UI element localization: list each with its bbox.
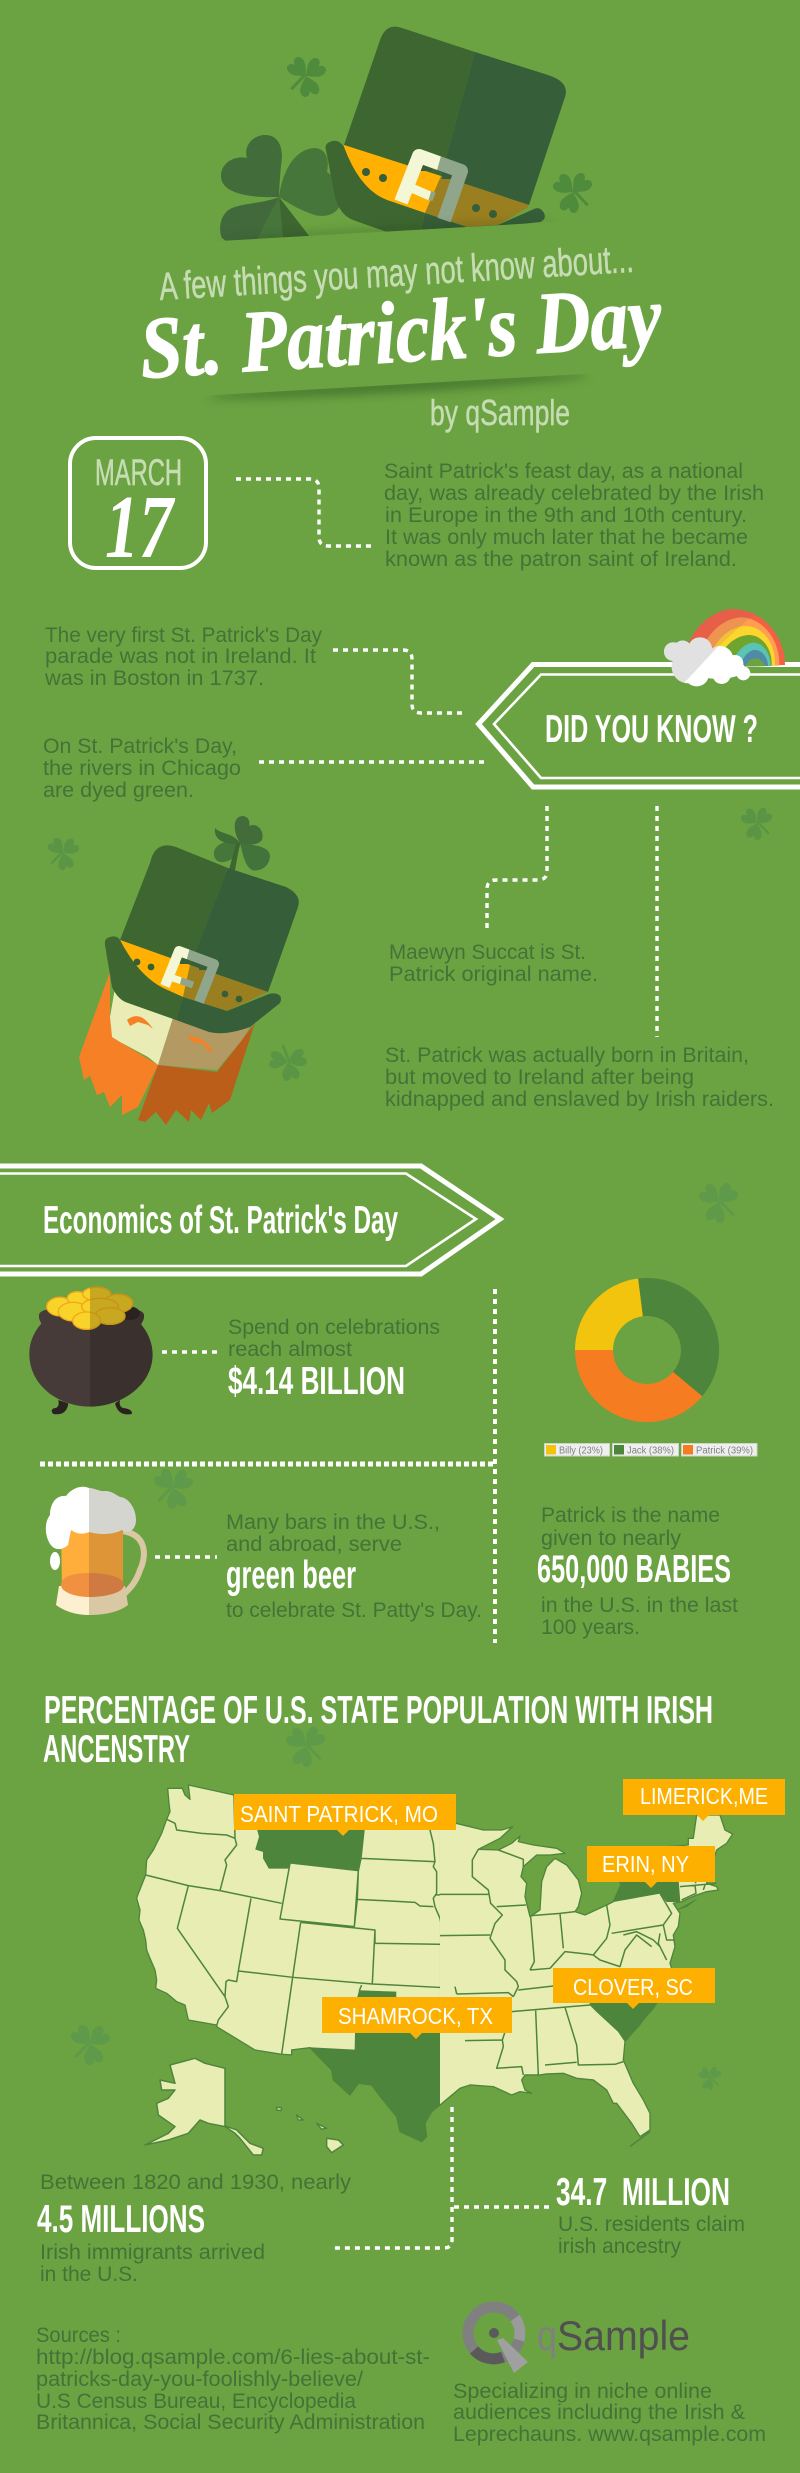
stat: Irish immigrants: in the U.S. [40, 2263, 138, 2286]
byline: by qSample [430, 392, 570, 433]
text: first parade: The very first St. Patrick's Day [45, 624, 322, 647]
text: Chicago river [43, 735, 241, 802]
hat brim [326, 141, 545, 235]
text: qSample description [453, 2380, 766, 2446]
text: first parade: parade was not in Ireland. It [45, 645, 316, 668]
connector: Chicago to banner [259, 760, 489, 764]
March label: MARCH [95, 452, 182, 493]
sources: Sources : [36, 2324, 121, 2347]
text: feast day: It was only much later that he became [385, 526, 748, 549]
text: Maewyn Succat: Maewyn Succat is St. [389, 941, 586, 964]
divider: vertical [493, 1289, 497, 1643]
green beer highlight: green beer [226, 1554, 356, 1597]
label: Erin [587, 1846, 715, 1888]
Hawaii [277, 2107, 343, 2153]
text: Chicago river: On St. Patrick's Day, [43, 735, 237, 758]
banner: economics [0, 1166, 500, 1274]
immigrants figure: 4.5 MILLIONS [37, 2198, 205, 2241]
hat band [344, 145, 529, 227]
text: born in Britain: but moved to Ireland after being [385, 1066, 694, 1089]
connector: to 34.7 million [454, 2205, 552, 2209]
icon: beer mug [46, 1487, 144, 1615]
eastern state lines [440, 1847, 717, 2147]
label: Saint Patrick: SAINT PATRICK, MO [240, 1801, 438, 1827]
label: Clover: CLOVER, SC [573, 1974, 693, 2000]
chart legend [544, 1444, 757, 1456]
text: feast day: Saint Patrick's feast day, as a national [384, 460, 743, 483]
title shadow [212, 374, 584, 402]
connector: Maewyn [487, 806, 547, 931]
stat: babies named Patrick: Patrick is the name [541, 1504, 720, 1527]
label: Erin: ERIN, NY [602, 1851, 689, 1877]
text: feast day: in Europe in the 9th and 10th century. [385, 504, 747, 527]
map: United States [137, 1779, 785, 2155]
eyebrows [127, 1016, 213, 1052]
text: feast day [384, 460, 764, 571]
stat: babies named Patrick: in the U.S. in the last [541, 1594, 738, 1617]
stat: celebration spend [228, 1316, 440, 1403]
donut chart [575, 1278, 719, 1422]
date box: March 17 [70, 438, 206, 577]
sources: http://blog.qsample.com/6-lies-about-st- [36, 2346, 430, 2369]
stat: Irish immigrants [37, 2171, 352, 2286]
New York [613, 1880, 680, 1902]
text: feast day: known as the patron saint of Ireland. [385, 548, 737, 571]
hat ground shadow [278, 220, 538, 238]
beer [61, 1525, 89, 1590]
stat: babies named Patrick: 100 years. [541, 1616, 640, 1639]
title: St. Patrick's Day [137, 268, 665, 398]
leprechaun hat brim [105, 936, 183, 1020]
spend figure: $4.14 BILLION [228, 1360, 405, 1403]
stat: babies named Patrick [537, 1504, 738, 1639]
sources: Britannica, Social Security Administration [36, 2411, 425, 2434]
icon: cloud [664, 637, 750, 686]
background shamrocks [46, 55, 774, 2091]
sources [36, 2324, 430, 2434]
hair [79, 972, 158, 1115]
map west [137, 1785, 472, 2155]
Montana [256, 1827, 364, 1871]
connector: parade to banner [333, 650, 467, 713]
text: Maewyn Succat: Patrick original name. [389, 963, 598, 986]
stat: babies named Patrick: given to nearly [541, 1527, 682, 1550]
stat: Irish immigrants: Between 1820 and 1930, nearly [40, 2171, 352, 2194]
stat: residents with Irish ancestry: irish ancestry [558, 2235, 681, 2258]
Texas [310, 1991, 472, 2142]
mug base [56, 1586, 89, 1615]
text: qSample description: Specializing in niche online [453, 2380, 712, 2403]
stat: green beer [226, 1511, 482, 1622]
stat: green beer: to celebrate St. Patty's Day. [226, 1599, 482, 1622]
foam [46, 1487, 89, 1549]
connector: beer [155, 1555, 217, 1559]
text: first parade: was in Boston in 1737. [44, 667, 264, 690]
sources: patricks-day-you-foolishly-believe/ [36, 2368, 363, 2391]
logo mark [468, 2307, 528, 2373]
text: feast day: day, was already celebrated by the Irish [384, 482, 764, 505]
label: Limerick [623, 1779, 785, 1821]
chart legend: Patrick (39%) [696, 1446, 753, 1456]
connector: map to stats [332, 2107, 452, 2248]
label: Saint Patrick [234, 1794, 456, 1836]
text: born in Britain: kidnapped and enslaved by Irish raiders. [385, 1088, 774, 1111]
shamrock on hat [214, 816, 270, 870]
text: qSample description: Leprechauns. www.qsample.com [453, 2423, 766, 2446]
day number: 17 [105, 478, 175, 577]
text: Chicago river: the rivers in Chicago [43, 757, 241, 780]
text: first parade [44, 624, 322, 690]
logo wordmark: Sample [557, 2312, 690, 2359]
leprechaun buckle [165, 951, 214, 1002]
icon: header hat and shamrock [220, 27, 566, 250]
leprechaun hat crown [120, 845, 228, 965]
sources: U.S Census Bureau, Encyclopedia [36, 2390, 356, 2413]
map east [440, 1815, 733, 2147]
label: Clover [553, 1968, 715, 2009]
hat band dots [362, 165, 497, 218]
beer bottom [61, 1573, 89, 1597]
connector: pot [162, 1350, 217, 1354]
icon: big shamrock [220, 135, 341, 250]
text: Maewyn Succat [389, 941, 598, 986]
logo wordmark: q [537, 2312, 557, 2359]
text: qSample description: audiences including the Irish & [453, 2401, 745, 2424]
stat: green beer: Many bars in the U.S., [226, 1511, 440, 1534]
text: Chicago river: are dyed green. [43, 779, 194, 802]
label: Limerick: LIMERICK,ME [640, 1783, 768, 1809]
stat: celebration spend: Spend on celebrations [228, 1316, 440, 1339]
icon: rainbow [688, 609, 785, 667]
western state lines [146, 1795, 465, 2054]
chart legend: Billy (23%) [559, 1446, 603, 1456]
label: Shamrock: SHAMROCK, TX [338, 2003, 493, 2029]
stat: residents with Irish ancestry: U.S. residents claim [558, 2213, 745, 2236]
connector: date to text [236, 479, 375, 546]
text: born in Britain: St. Patrick was actually born in Britain, [385, 1044, 749, 1067]
face [110, 988, 173, 1065]
leprechaun hat band [120, 940, 190, 997]
heading: map section: ANCENSTRY [43, 1728, 190, 1771]
icon: pot of gold [29, 1287, 153, 1414]
icon: hat crown [344, 27, 566, 205]
icon: buckle [401, 156, 461, 220]
economics heading: Economics of St. Patrick's Day [43, 1199, 398, 1242]
text: born in Britain [385, 1044, 774, 1111]
mug handle [122, 1531, 144, 1596]
stat: celebration spend: reach almost [228, 1338, 352, 1361]
Alaska [145, 2058, 263, 2155]
stat: Irish immigrants: Irish immigrants arrived [40, 2241, 265, 2264]
South Carolina [590, 2002, 657, 2042]
banner: did you know [478, 664, 800, 787]
divider: horizontal [40, 1462, 495, 1466]
connector: Britain [655, 806, 659, 1037]
heading: map section [43, 1689, 713, 1771]
chart legend: Jack (38%) [627, 1446, 674, 1456]
band details [134, 959, 242, 1002]
icon: leprechaun [79, 816, 299, 1125]
stat: green beer: and abroad, serve [226, 1533, 402, 1556]
logo: qSample [468, 2307, 690, 2373]
stat: residents with Irish ancestry [556, 2171, 745, 2258]
label: Shamrock [322, 1997, 512, 2039]
